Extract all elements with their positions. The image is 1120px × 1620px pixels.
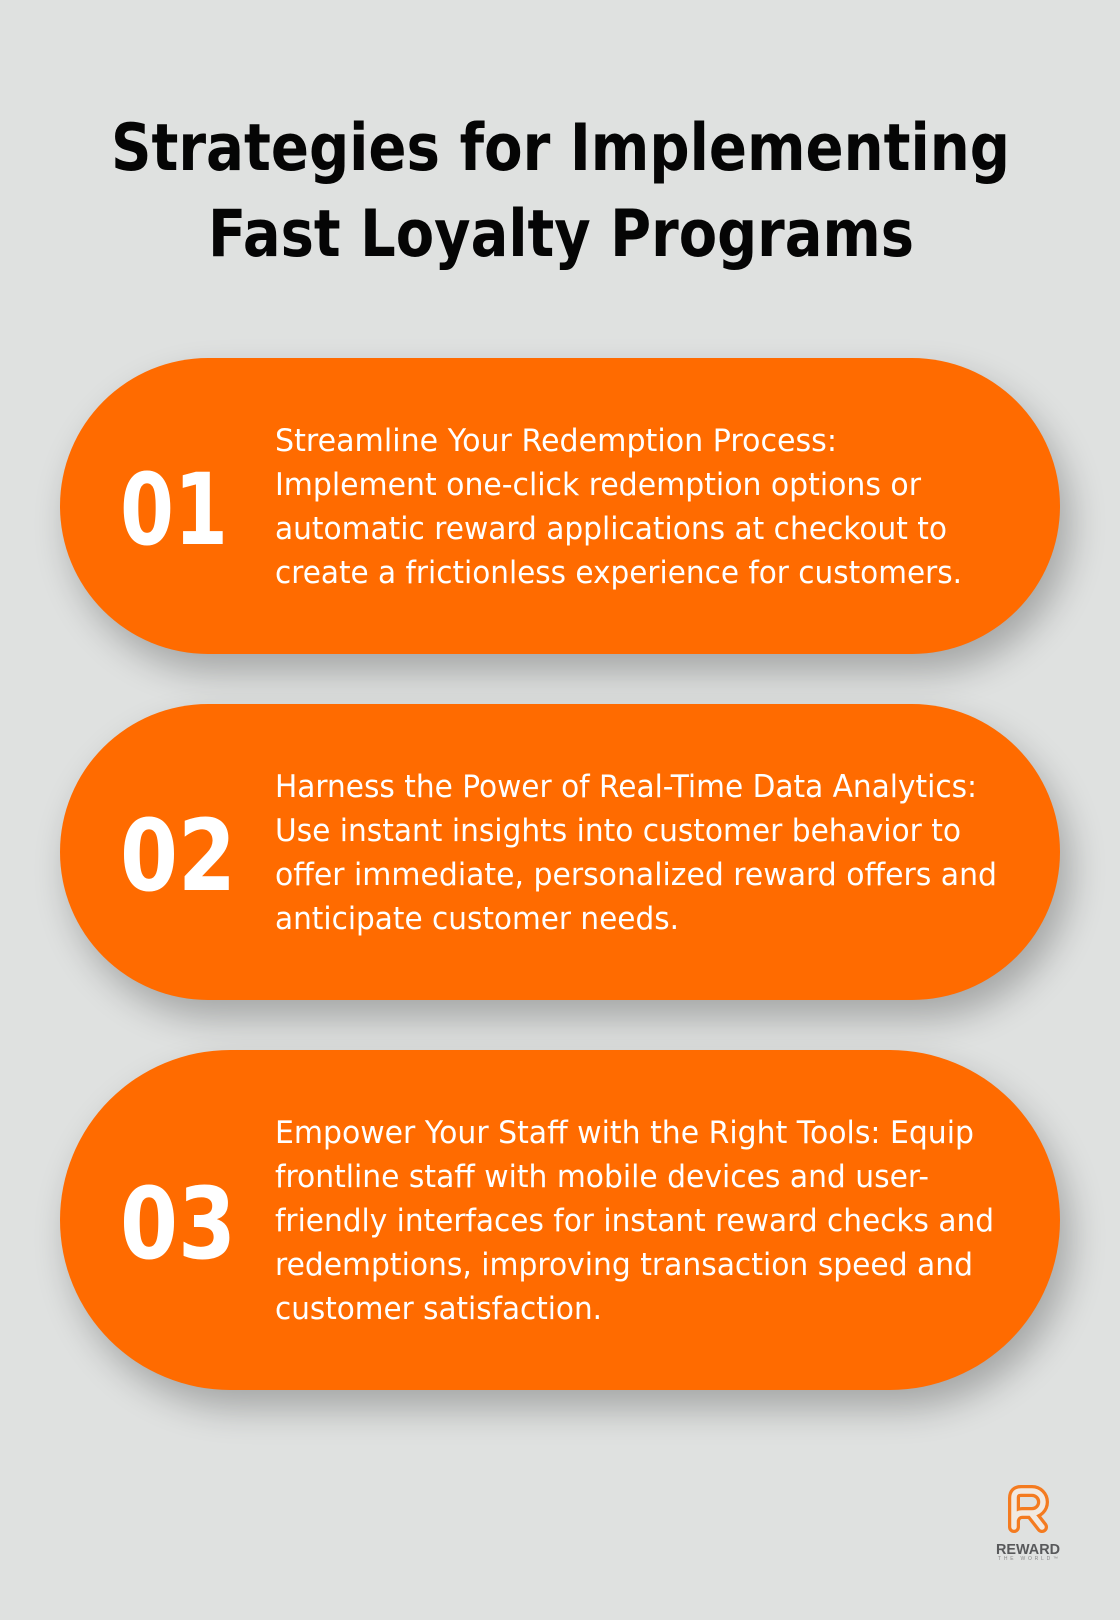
- text: step 03 description: friendly interfaces for instant reward checks and: [275, 1203, 994, 1239]
- text: step 02 description: Use instant insights into customer behavior to: [275, 813, 961, 849]
- text: step 02 description: [275, 769, 997, 937]
- panel: step 02: [60, 704, 1070, 1018]
- title: Strategies for Implementing: [111, 111, 1010, 186]
- text: step 01 description: create a frictionless experience for customers.: [275, 555, 962, 591]
- title: [111, 111, 1010, 272]
- panel: step 03: [60, 1050, 1070, 1408]
- logo tagline: THE WORLD™: [998, 1556, 1058, 1562]
- text: step 03 description: redemptions, improving transaction speed and: [275, 1247, 973, 1283]
- text: step 02 description: Harness the Power of Real-Time Data Analytics:: [275, 769, 977, 805]
- number 01: 01: [120, 453, 228, 568]
- text: step 01 description: Implement one-click redemption options or: [275, 467, 921, 503]
- text: step 01 description: automatic reward applications at checkout to: [275, 511, 947, 547]
- text: step 01 description: Streamline Your Redemption Process:: [275, 423, 837, 459]
- panel: step 01: [60, 358, 1070, 672]
- number 02: 02: [120, 799, 236, 914]
- title: Fast Loyalty Programs: [208, 197, 914, 272]
- text: step 03 description: customer satisfaction.: [275, 1291, 602, 1327]
- icon: Reward the World logo: [996, 1491, 1060, 1562]
- logo wordmark: REWARD: [996, 1542, 1060, 1558]
- logo mark: R: [1014, 1491, 1043, 1527]
- text: step 03 description: frontline staff with mobile devices and user-: [275, 1159, 929, 1195]
- text: step 02 description: anticipate customer needs.: [275, 901, 679, 937]
- text: step 02 description: offer immediate, personalized reward offers and: [275, 857, 997, 893]
- text: step 03 description: Empower Your Staff with the Right Tools: Equip: [275, 1115, 974, 1151]
- text: step 01 description: [275, 423, 962, 591]
- text: step 03 description: [275, 1115, 994, 1327]
- number 03: 03: [120, 1167, 236, 1282]
